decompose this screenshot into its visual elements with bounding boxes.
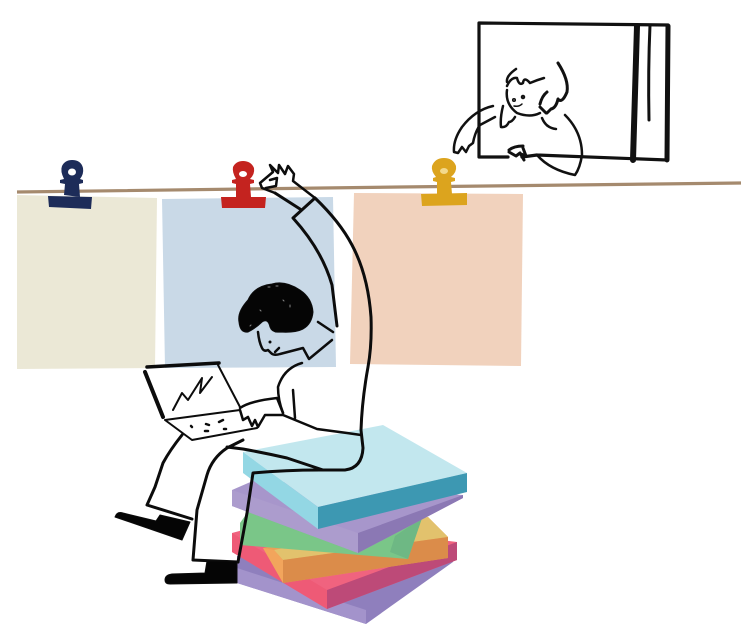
green pad [240, 495, 422, 559]
laptop [145, 363, 257, 440]
note: blue [162, 197, 336, 368]
woman [454, 63, 582, 175]
face and collar [258, 322, 333, 359]
orange pad [263, 517, 448, 583]
legs [147, 435, 323, 562]
pink pad [232, 520, 457, 609]
string [17, 183, 741, 192]
hair [239, 283, 313, 332]
sticky note stack [232, 425, 467, 624]
man with laptop [115, 165, 371, 584]
bottom purple pad [237, 552, 453, 624]
window with woman [454, 23, 668, 175]
purple pad [232, 480, 463, 553]
shoes [115, 512, 190, 540]
cyan pad [243, 425, 467, 507]
note: peach [350, 193, 523, 366]
clip: gold [421, 158, 467, 206]
clip: navy [48, 160, 92, 209]
arm and torso outline [238, 193, 371, 562]
shoulder and sleeve [278, 363, 302, 418]
curtain lines [633, 25, 668, 160]
window frame [479, 23, 668, 160]
raised hand [260, 165, 315, 198]
clip: red [221, 161, 266, 208]
note: cream [17, 195, 157, 369]
hand on laptop [240, 398, 361, 435]
